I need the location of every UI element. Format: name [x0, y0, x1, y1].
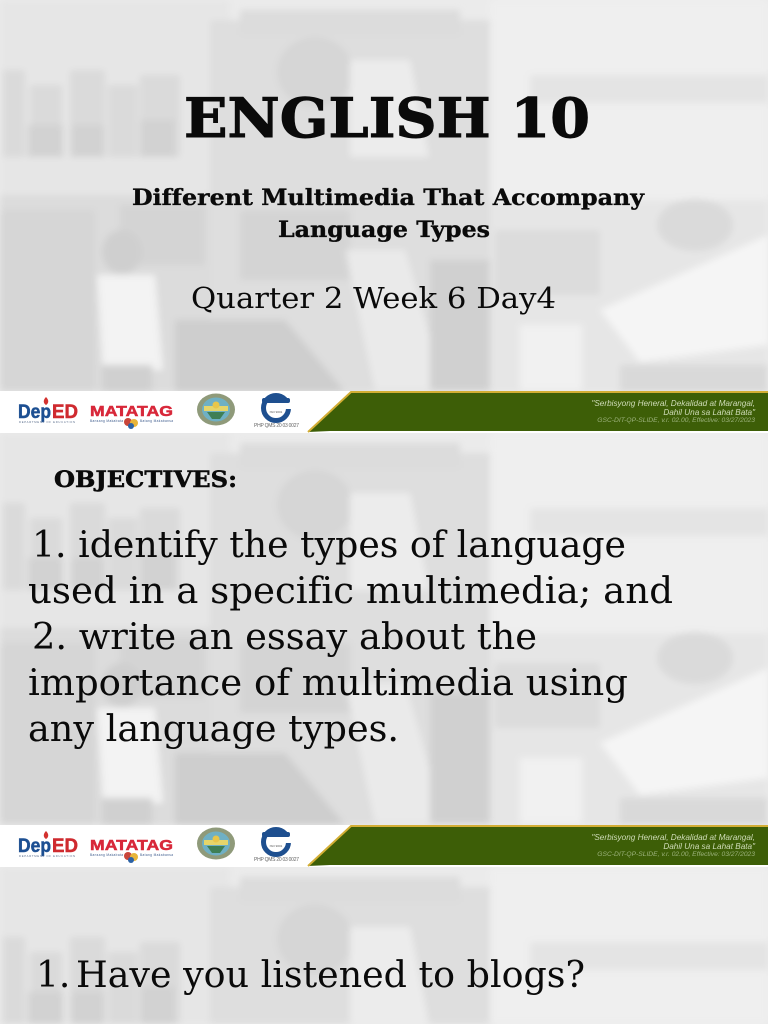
slide 1 background photo [0, 0, 768, 392]
quarter and week label: Quarter 2 Week 6 Day4 [191, 281, 556, 315]
objectives list [28, 525, 673, 750]
subtitle: Language Types [278, 217, 490, 243]
subtitle: Different Multimedia That Accompany [132, 185, 645, 211]
objectives list: any language types. [28, 709, 399, 750]
question: 1. [36, 955, 70, 996]
objectives list: 2. write an essay about the [32, 617, 537, 658]
title: ENGLISH 10 [184, 86, 590, 150]
objectives list: used in a specific multimedia; and [28, 571, 673, 612]
objectives heading: OBJECTIVES: [54, 467, 237, 493]
question: Have you listened to blogs? [76, 955, 585, 996]
subtitle [132, 185, 645, 243]
banner 2 [0, 825, 768, 867]
slide 2 background photo [0, 433, 768, 825]
objectives list: 1. identify the types of language [32, 525, 626, 566]
banner 1 [0, 391, 768, 433]
objectives list: importance of multimedia using [28, 663, 628, 704]
slide 3 background photo [0, 867, 768, 1024]
